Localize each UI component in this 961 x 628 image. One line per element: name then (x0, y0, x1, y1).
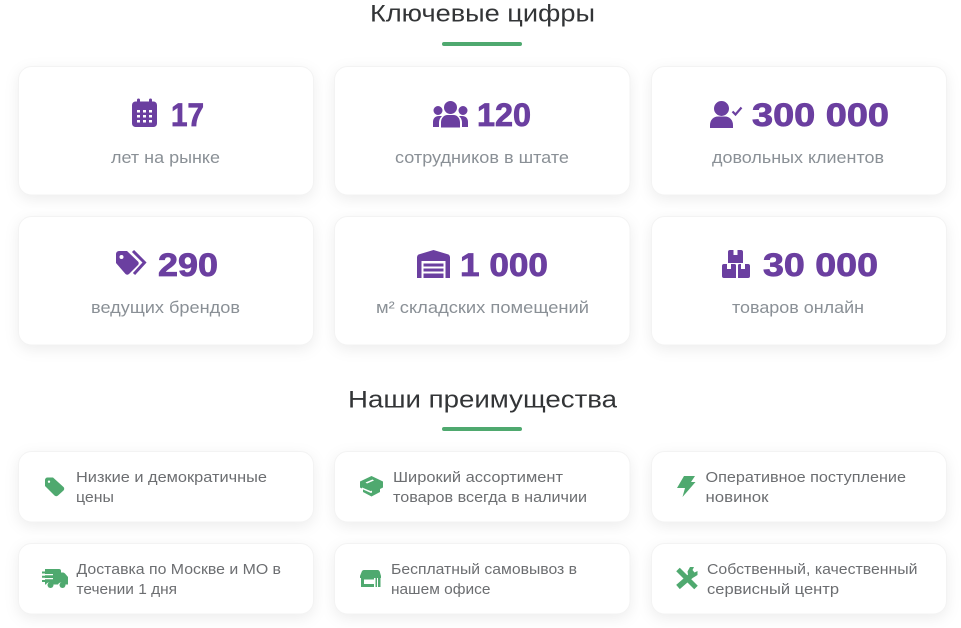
icon: people (433, 101, 468, 128)
panel: wide assortment (334, 452, 630, 522)
text (76, 561, 281, 598)
number: 290: 290 (158, 247, 218, 283)
panel: warehouse (334, 216, 630, 345)
text: товаров всегда в наличии (393, 489, 587, 506)
icon: tags (116, 251, 144, 275)
icon: warehouse (417, 250, 450, 278)
text: Оперативное поступление (706, 469, 906, 486)
icon: price tag (45, 478, 64, 496)
icon: user with check (710, 101, 742, 128)
text: Широкий ассортимент (393, 469, 563, 486)
number: 1 000: 1 000 (460, 247, 548, 283)
number: 17: 17 (171, 97, 204, 133)
text: Низкие и демократичные (76, 469, 267, 486)
icon: delivery truck (42, 569, 68, 588)
panel: products online (652, 216, 946, 345)
text: Собственный, качественный (707, 561, 918, 578)
panel: delivery (18, 544, 314, 614)
number: 30 000: 30 000 (763, 247, 878, 283)
text (706, 469, 906, 506)
text: нашем офисе (391, 581, 490, 598)
panel: service center (652, 544, 946, 614)
label: лет на рынке (111, 149, 220, 167)
label: товаров онлайн (732, 299, 864, 317)
heading: our advantages: Наши преимущества (348, 386, 617, 414)
heading: our advantages (348, 386, 617, 431)
text: Доставка по Москве и МО в (76, 561, 281, 578)
label: довольных клиентов (712, 149, 884, 167)
number: 300 000: 300 000 (752, 97, 889, 133)
icon: crossed tools (678, 567, 698, 588)
panel: free pickup (334, 544, 630, 614)
icon: calendar (132, 99, 157, 127)
icon: store (360, 570, 381, 587)
text: новинок (706, 489, 769, 506)
icon: open box (360, 476, 383, 496)
icon: boxes (722, 250, 750, 278)
heading: key figures (370, 0, 595, 46)
heading: key figures: Ключевые цифры (370, 0, 595, 28)
panel: years on the market (18, 66, 314, 195)
text: сервисный центр (707, 581, 839, 598)
text: Бесплатный самовывоз в (391, 561, 577, 578)
panel: low prices (18, 452, 314, 522)
panel: brands (18, 216, 314, 345)
panel: customers (652, 66, 946, 195)
label: м² складских помещений (376, 299, 589, 317)
number: 120: 120 (477, 97, 531, 133)
label: ведущих брендов (91, 299, 240, 317)
icon: lightning bolt (677, 476, 696, 497)
text: цены (76, 489, 114, 506)
text (391, 561, 577, 598)
panel: fast arrivals (652, 452, 946, 522)
text (76, 469, 267, 506)
text (707, 561, 918, 598)
text (393, 469, 587, 506)
panel: employees (334, 66, 630, 195)
text: течении 1 дня (76, 581, 177, 598)
label: сотрудников в штате (395, 149, 569, 167)
